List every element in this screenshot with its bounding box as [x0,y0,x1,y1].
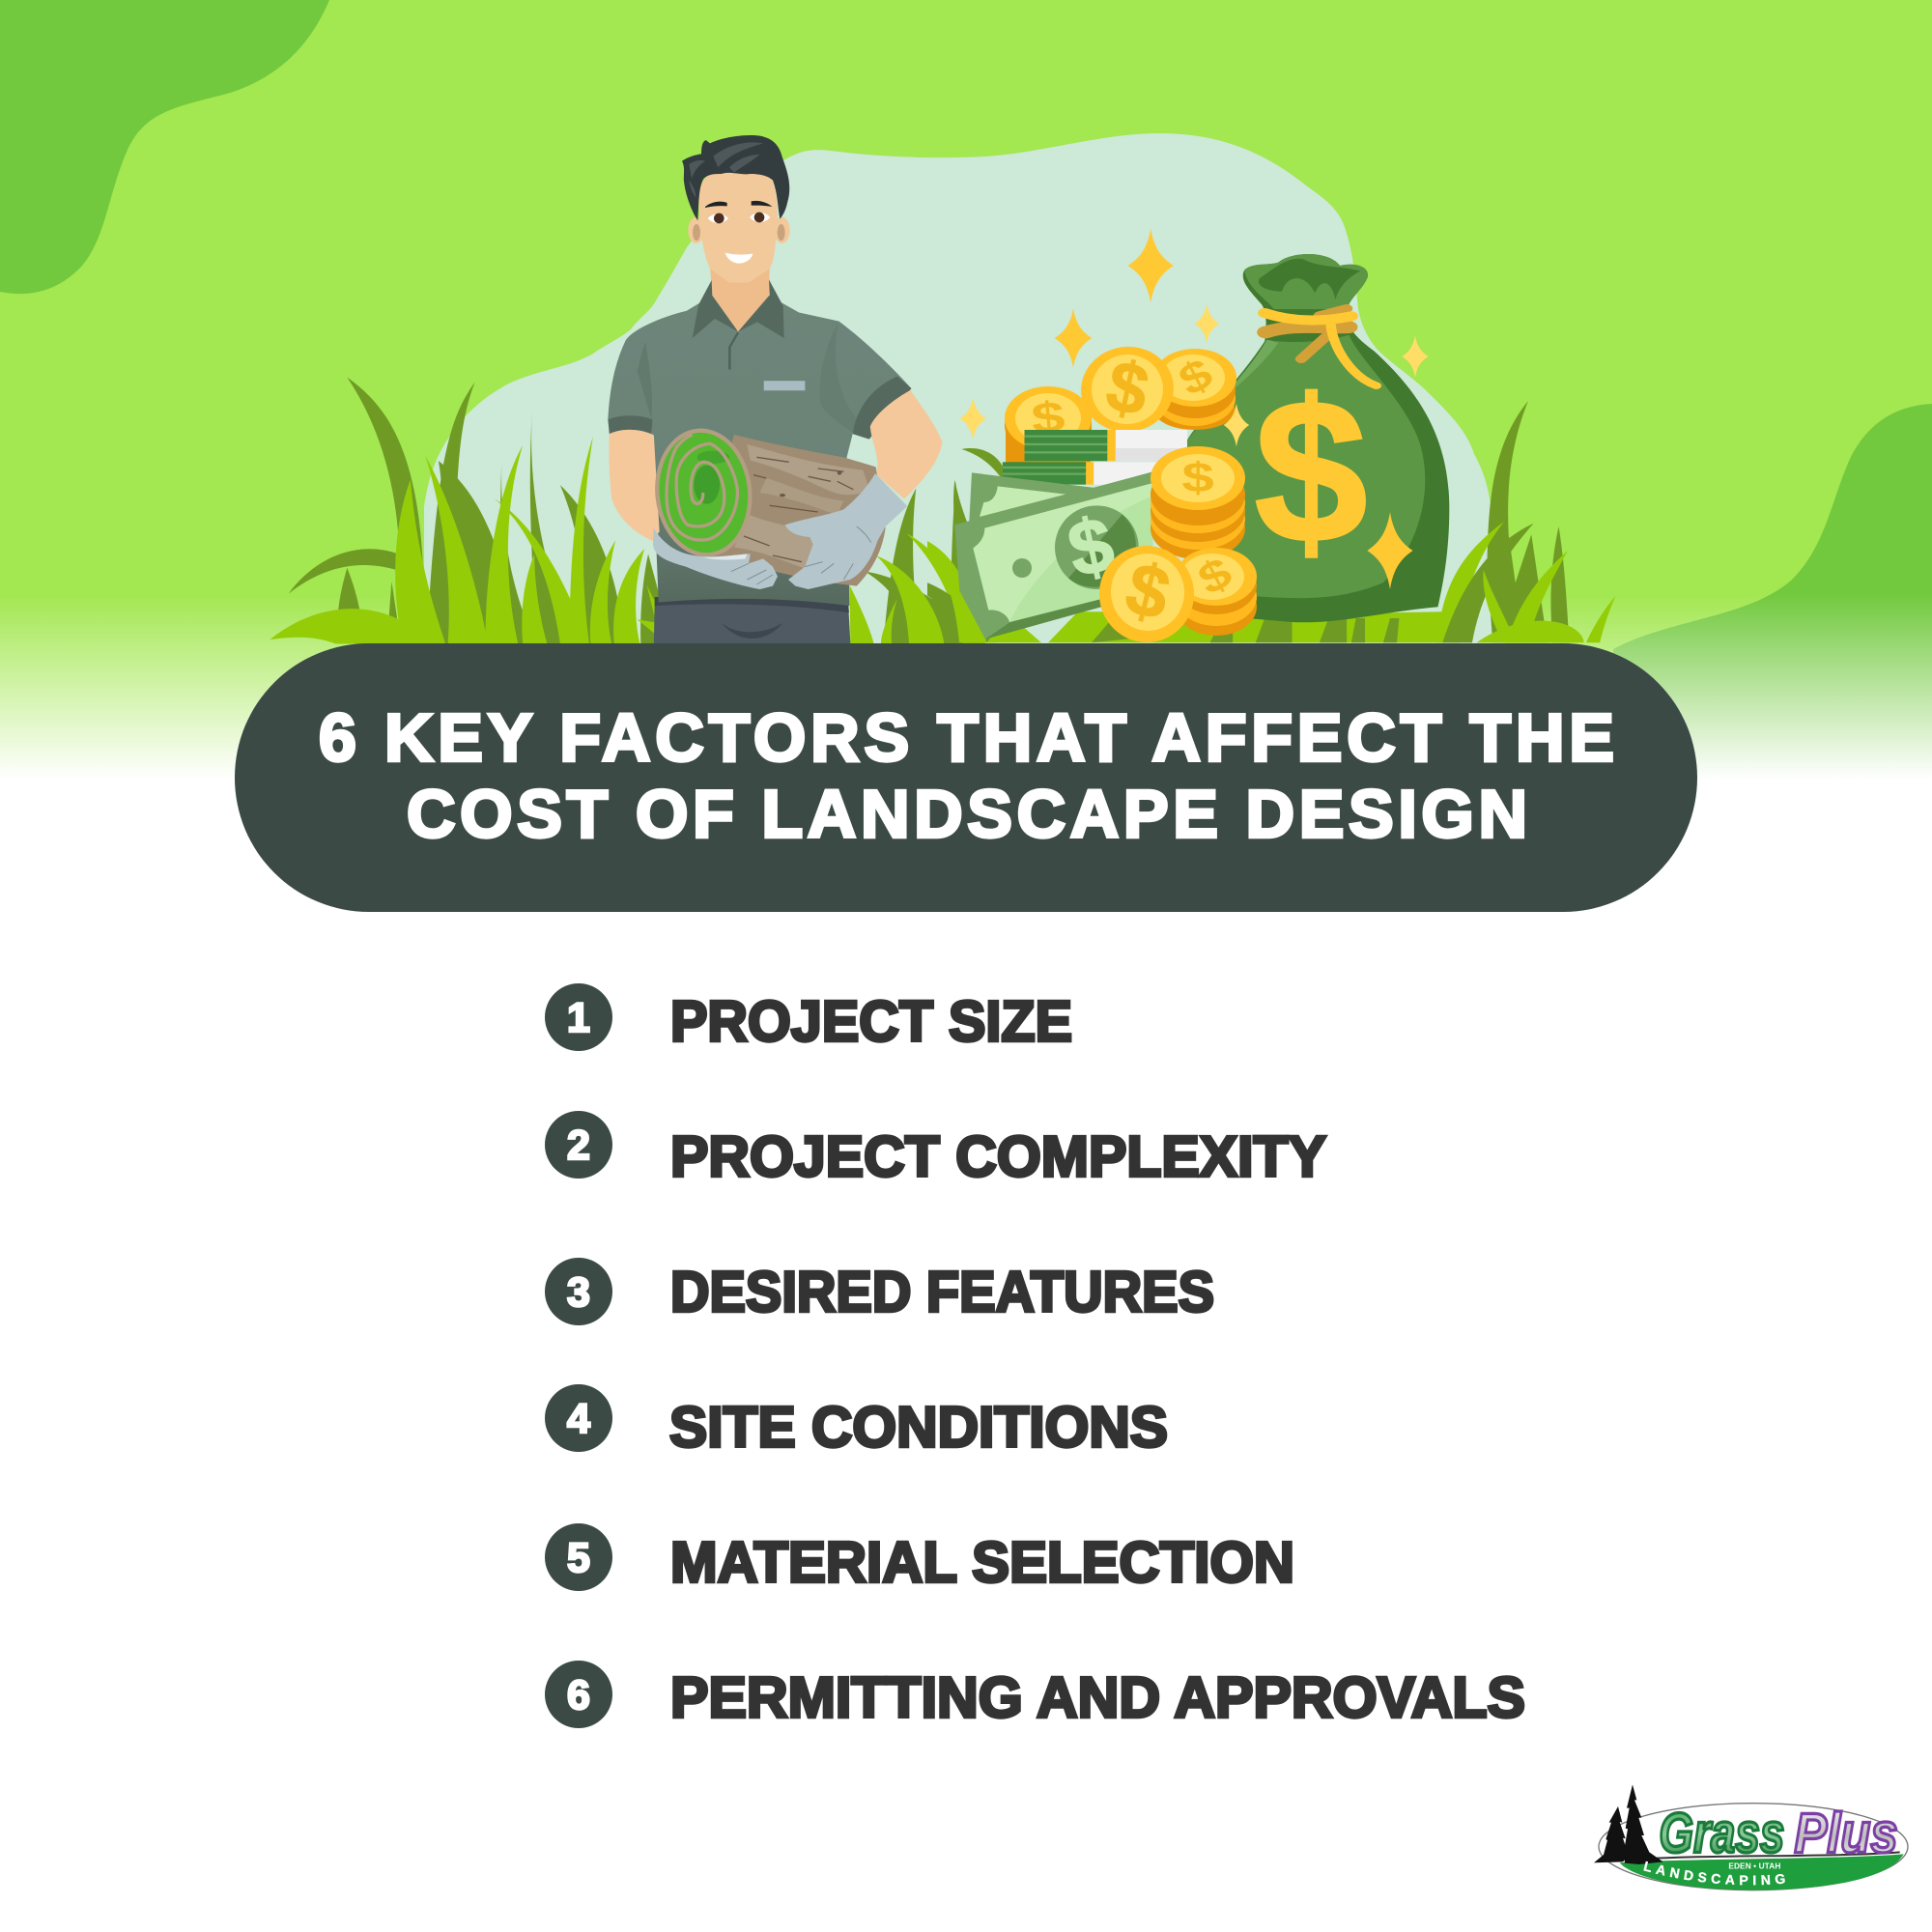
item 4: SITE CONDITIONS [669,1395,1168,1459]
man: eyes [708,213,770,223]
logo: Grass wordmark: Grass [1659,1803,1784,1865]
item 1: PROJECT SIZE [670,989,1072,1053]
item 3: DESIRED FEATURES [670,1260,1214,1323]
man: trousers [654,595,850,643]
bag: inner opening [1259,259,1360,299]
grass: behind and right of the money [927,401,1616,642]
item 1 [545,983,1072,1053]
bag: light body [1182,335,1425,598]
sparkles [960,229,1429,589]
coin: bottom front [1094,541,1199,647]
man: mouth [725,253,753,264]
coin: middle front: $ [1100,345,1155,431]
item 2: 2 [567,1122,590,1169]
man: head [682,135,790,338]
coin: back right with stack: $ [1171,349,1220,406]
background: green header [0,0,1932,779]
title pill [235,643,1697,912]
item 4 [545,1384,1168,1459]
blob: bottom-right corner [1613,404,1932,779]
item 3: 3 [567,1269,590,1316]
item 5: 5 [567,1535,590,1581]
list: six factors [545,983,1525,1729]
illustration: man holding sod roll [608,135,942,643]
sod roll and gloves [649,423,907,589]
item 4: 4 [567,1396,590,1442]
banknote [954,471,1152,639]
banknote: back flap [969,471,1152,522]
blob: pale backdrop [424,133,1506,645]
title: 6 KEY FACTORS THAT AFFECT THE [319,699,1614,775]
man: shirt [608,296,911,606]
bag: neck [1244,254,1368,309]
glove: right [785,473,907,589]
logo: trees [1594,1784,1663,1864]
item 1: 1 [567,995,590,1041]
coin: back left with stack: $ [1030,392,1066,443]
bag: body [1182,254,1449,622]
banknote: front [954,471,1152,639]
man: neck [710,268,770,331]
coin stack [1151,446,1245,559]
man: ears [688,217,790,243]
title: COST OF LANDSCAPE DESIGN [407,777,1527,852]
coin: back right with stack [1153,349,1236,430]
banknote: seal [1055,505,1139,589]
sod roll: spiral end [649,423,758,562]
item 6: 6 [567,1672,590,1719]
blob: top-left corner [0,0,329,294]
sod roll: log body [698,435,886,586]
title [319,699,1614,852]
bundle: top [1025,430,1187,461]
man: arms [609,390,942,541]
coin: bottom front: $ [1118,547,1178,637]
bag: rope [1264,308,1377,385]
grass: bright blades [270,437,659,643]
glove: left [653,528,778,589]
logo: Plus wordmark: Plus [1794,1803,1898,1865]
logo: oval [1599,1804,1908,1890]
man: collar [693,279,784,338]
bag: left highlight [1185,340,1278,444]
logo: green band [1620,1854,1904,1890]
banknote: dollar sign: $ [1061,500,1121,593]
bundle: bottom [1003,462,1162,485]
bag: dollar sign: $ [1254,356,1368,585]
item 5: MATERIAL SELECTION [670,1530,1294,1594]
background: fade to white [0,594,1932,780]
grass: dark blades [289,378,659,643]
man: body [608,296,942,643]
grass: left of the man [270,378,985,643]
cash bundles [1003,430,1187,485]
logo: Grass Plus Landscaping [1594,1785,1909,1891]
man: eyebrows [705,201,772,208]
coin: bottom back [1176,548,1257,636]
item 2: PROJECT COMPLEXITY [670,1124,1326,1188]
coin: bottom back: $ [1190,548,1239,605]
logo: location: EDEN • UTAH [1728,1861,1780,1871]
coin: middle front [1075,341,1179,438]
logo: landscaping: LANDSCAPING [1643,1861,1785,1886]
grass: right of the man [849,482,985,643]
item 2 [545,1111,1326,1188]
coin stack: $ [1181,455,1214,501]
banknote: dot [1012,558,1032,578]
man: face [698,169,778,283]
man: hair [682,135,789,220]
coin: back left with stack [1005,386,1092,488]
illustration: money bag [1182,254,1449,622]
item 6: PERMITTING AND APPROVALS [670,1665,1525,1729]
